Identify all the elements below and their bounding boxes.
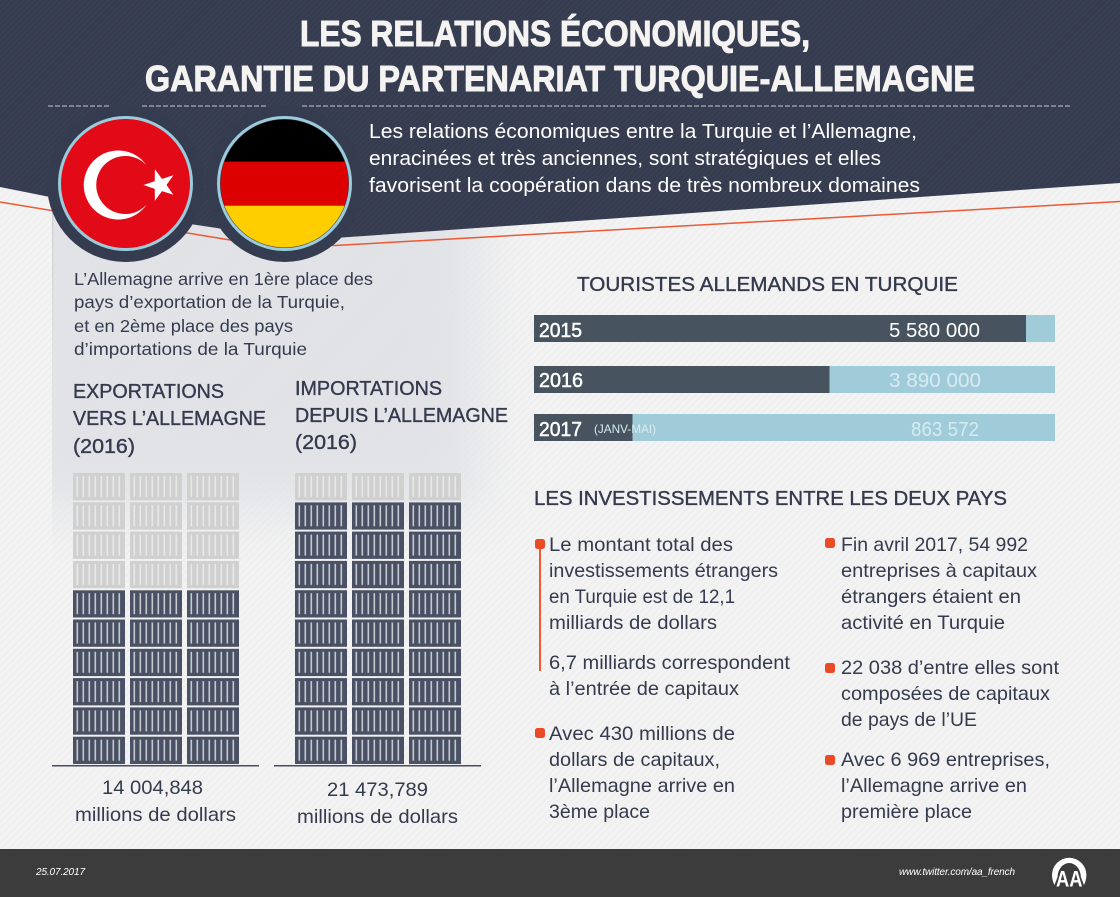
heading: exports [73,380,266,458]
bar 2015: 2015 [539,319,582,342]
export value: millions de dollars [75,804,236,826]
trade intro text: L’Allemagne arrive en 1ère place des [74,269,373,289]
text block: 22 038 companies: 22 038 d’entre elles sont [841,657,1060,679]
trade intro text: d’importations de la Turquie [74,339,307,359]
text block: 430 million: Avec 430 millions de [549,723,735,745]
heading: German tourists: TOURISTES ALLEMANDS EN TURQUIE [577,273,958,296]
intro text [369,121,920,197]
text block: total investment: 6,7 milliards correspondent [549,652,791,674]
bar 2017: 2017 [539,418,582,441]
title: GARANTIE DU PARTENARIAT TURQUIE-ALLEMAGNE [145,58,975,99]
dashed divider [48,105,1070,107]
bar 2017: (JANV-MAI) [594,422,656,436]
icon: AA logo: AA [1056,866,1083,892]
bar 2015 [534,315,1055,342]
panel: left trade background [52,212,484,514]
text block: 430 million: l’Allemagne arrive en [549,775,735,797]
text block: total investment: investissements étrangers [549,560,778,582]
heading: imports: DEPUIS L’ALLEMAGNE [295,404,508,427]
header band [0,0,1120,262]
bar 2017: 863 572 [911,419,979,441]
text block: 6 969 companies [825,749,1050,823]
text block: total investment: Le montant total des [549,534,733,556]
icon: Turkish flag [60,118,192,250]
text block: total investment: milliards de dollars [549,612,717,634]
text block: 22 038 companies: composées de capitaux [841,683,1050,705]
trade intro text: pays d’exportation de la Turquie, [74,292,345,312]
icon: AA logo [1052,858,1086,892]
heading: exports: VERS L’ALLEMAGNE [73,407,266,430]
text block: 430 million: dollars de capitaux, [549,749,720,771]
heading: investments: LES INVESTISSEMENTS ENTRE LES DEUX PAYS [534,487,1007,510]
bar 2016 [534,366,1055,393]
text block: total investment [535,534,791,700]
bar 2015: 5 580 000 [889,320,980,342]
bar 2017 [534,414,1055,441]
text block: 6 969 companies: l’Allemagne arrive en [841,775,1027,797]
trade intro text: et en 2ème place des pays [74,316,293,336]
text block: 6 969 companies: Avec 6 969 entreprises, [841,749,1050,771]
text block: 22 038 companies: de pays de l’UE [841,709,977,731]
intro text: Les relations économiques entre la Turquie et l’Allemagne, [369,121,917,143]
chart: export containers [52,473,259,766]
source link: www.twitter.com/aa_french [899,867,1015,878]
text block: total investment: en Turquie est de 12,1 [549,586,735,608]
heading: exports: (2016) [73,435,135,458]
text block: 54 992 companies: activité en Turquie [841,612,1005,634]
intro text: favorisent la coopération dans de très nombreux domaines [369,175,920,197]
text block: 54 992 companies [825,534,1037,634]
accent line [0,202,1120,246]
title [145,13,975,99]
text block: 430 million: 3ème place [549,801,650,823]
heading: imports: (2016) [295,431,357,454]
bar chart: tourists [534,315,1055,441]
text block: 6 969 companies: première place [841,801,972,823]
text block: 54 992 companies: entreprises à capitaux [841,560,1037,582]
bar 2016: 3 890 000 [889,370,981,392]
text block: 54 992 companies: étrangers étaient en [841,586,1021,608]
chart: import containers [274,473,481,766]
bar 2016: 2016 [539,369,583,392]
text block: 54 992 companies: Fin avril 2017, 54 992 [841,534,1028,556]
footer [0,849,1120,897]
title: LES RELATIONS ÉCONOMIQUES, [300,13,810,54]
heading: exports: EXPORTATIONS [73,380,224,403]
import value: 21 473,789 [327,779,428,801]
export value [75,777,236,826]
icon: German flag [217,116,352,252]
heading: imports: IMPORTATIONS [295,377,442,400]
text block: total investment: à l’entrée de capitaux [549,678,739,700]
date: 25.07.2017 [35,867,85,878]
export value: 14 004,848 [102,777,203,799]
intro text: enracinées et très anciennes, sont stratégiques et elles [369,148,881,170]
import value: millions de dollars [297,806,458,828]
import value [297,779,458,828]
text block: 430 million [535,723,735,823]
heading: imports [295,377,508,454]
text block: 22 038 companies [825,657,1060,731]
trade intro text [74,269,373,359]
